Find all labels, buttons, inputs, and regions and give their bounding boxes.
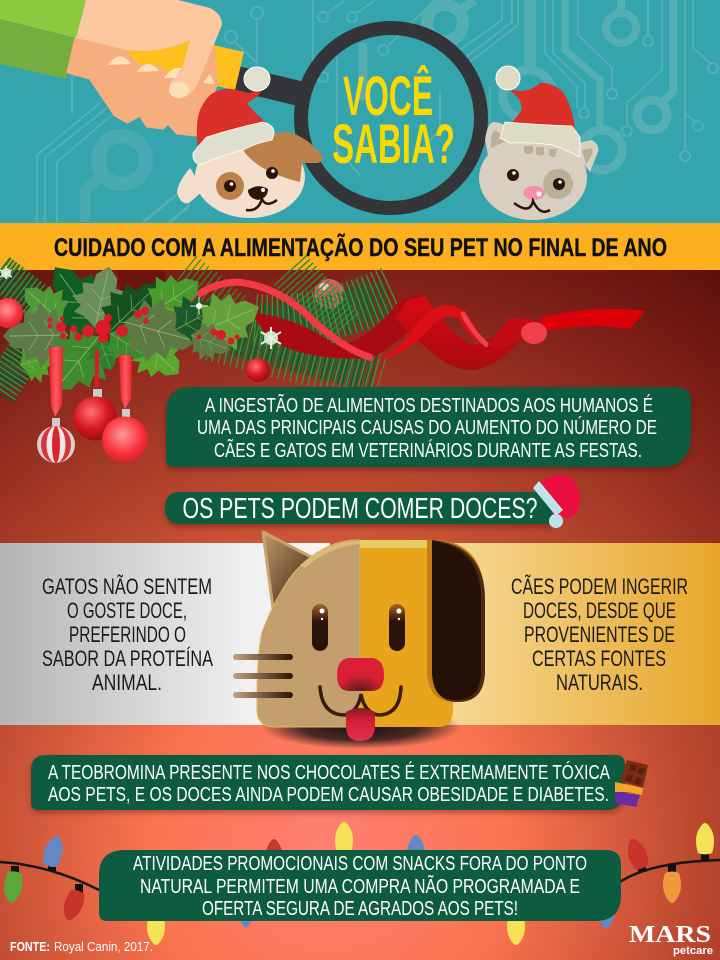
title band	[0, 223, 720, 270]
circuit board pattern	[37, 0, 718, 222]
cat text: PREFERINDO O	[69, 622, 186, 647]
header panel	[0, 0, 720, 223]
dog text	[511, 574, 688, 695]
holly leaves	[2, 247, 271, 411]
dog text: CERTAS FONTES	[532, 646, 666, 671]
heading: você sabia	[332, 64, 455, 175]
cat text: ANIMAL.	[92, 670, 162, 695]
grip	[127, 40, 191, 74]
panel: promotional text: ATIVIDADES PROMOCIONAIS COM SNACKS FORA DO PONTO	[133, 853, 587, 875]
eyes	[312, 604, 328, 651]
icon: christmas lights	[0, 822, 720, 945]
heading: você sabia: VOCÊ	[343, 64, 433, 127]
logo: mars petcare: petcare	[673, 945, 713, 957]
panel: promotional text	[99, 850, 621, 921]
panel: theobromine text	[31, 755, 625, 810]
lower hand	[68, 38, 217, 135]
nose	[337, 658, 384, 691]
cat text	[42, 574, 213, 695]
icon: magnifier ring	[301, 28, 481, 208]
panel: promotional text: NATURAL PERMITEM UMA COMPRA NÃO PROGRAMADA E	[140, 874, 580, 898]
cat text: GATOS NÃO SENTEM	[42, 574, 212, 599]
upper hand and thumb	[76, 0, 222, 98]
christmas garland	[0, 247, 645, 463]
source note: FONTE:	[10, 939, 50, 954]
panel: ingestion text	[166, 387, 691, 467]
icon: cat-dog face	[233, 532, 485, 749]
berries	[48, 307, 240, 344]
heading: você sabia: SABIA?	[332, 112, 455, 175]
question heading: OS PETS PODEM COMER DOCES?	[182, 493, 538, 525]
cat text: O GOSTE DOCE,	[67, 598, 187, 623]
source note: Royal Canin, 2017.	[54, 939, 153, 954]
logo: mars petcare	[629, 922, 713, 957]
ribbon	[190, 282, 645, 370]
logo: mars petcare: MARS	[629, 922, 711, 948]
cat text: SABOR DA PROTEÍNA	[42, 646, 213, 671]
hanging baubles	[0, 298, 270, 463]
icon: cat with santa hat	[479, 66, 598, 220]
icon: santa hat	[533, 475, 580, 528]
dog text: NATURAIS.	[556, 670, 643, 695]
whiskers	[233, 654, 293, 660]
panel: promotional text: OFERTA SEGURA DE AGRADOS AOS PETS!	[202, 898, 518, 920]
icon: chocolate bar	[615, 760, 648, 807]
snowflake	[0, 266, 281, 349]
icon: hand holding magnifier	[0, 0, 305, 135]
panel: cat vs dog band	[0, 543, 720, 725]
sleeve	[0, 0, 86, 38]
pine branches	[0, 270, 395, 395]
icon: dog with santa hat	[177, 67, 323, 218]
pine underlay	[0, 280, 375, 385]
sparkle	[190, 297, 208, 315]
mouth	[320, 687, 401, 715]
tongue	[346, 708, 375, 741]
magnifier handle	[232, 66, 305, 106]
bauble behind pine	[314, 279, 344, 309]
